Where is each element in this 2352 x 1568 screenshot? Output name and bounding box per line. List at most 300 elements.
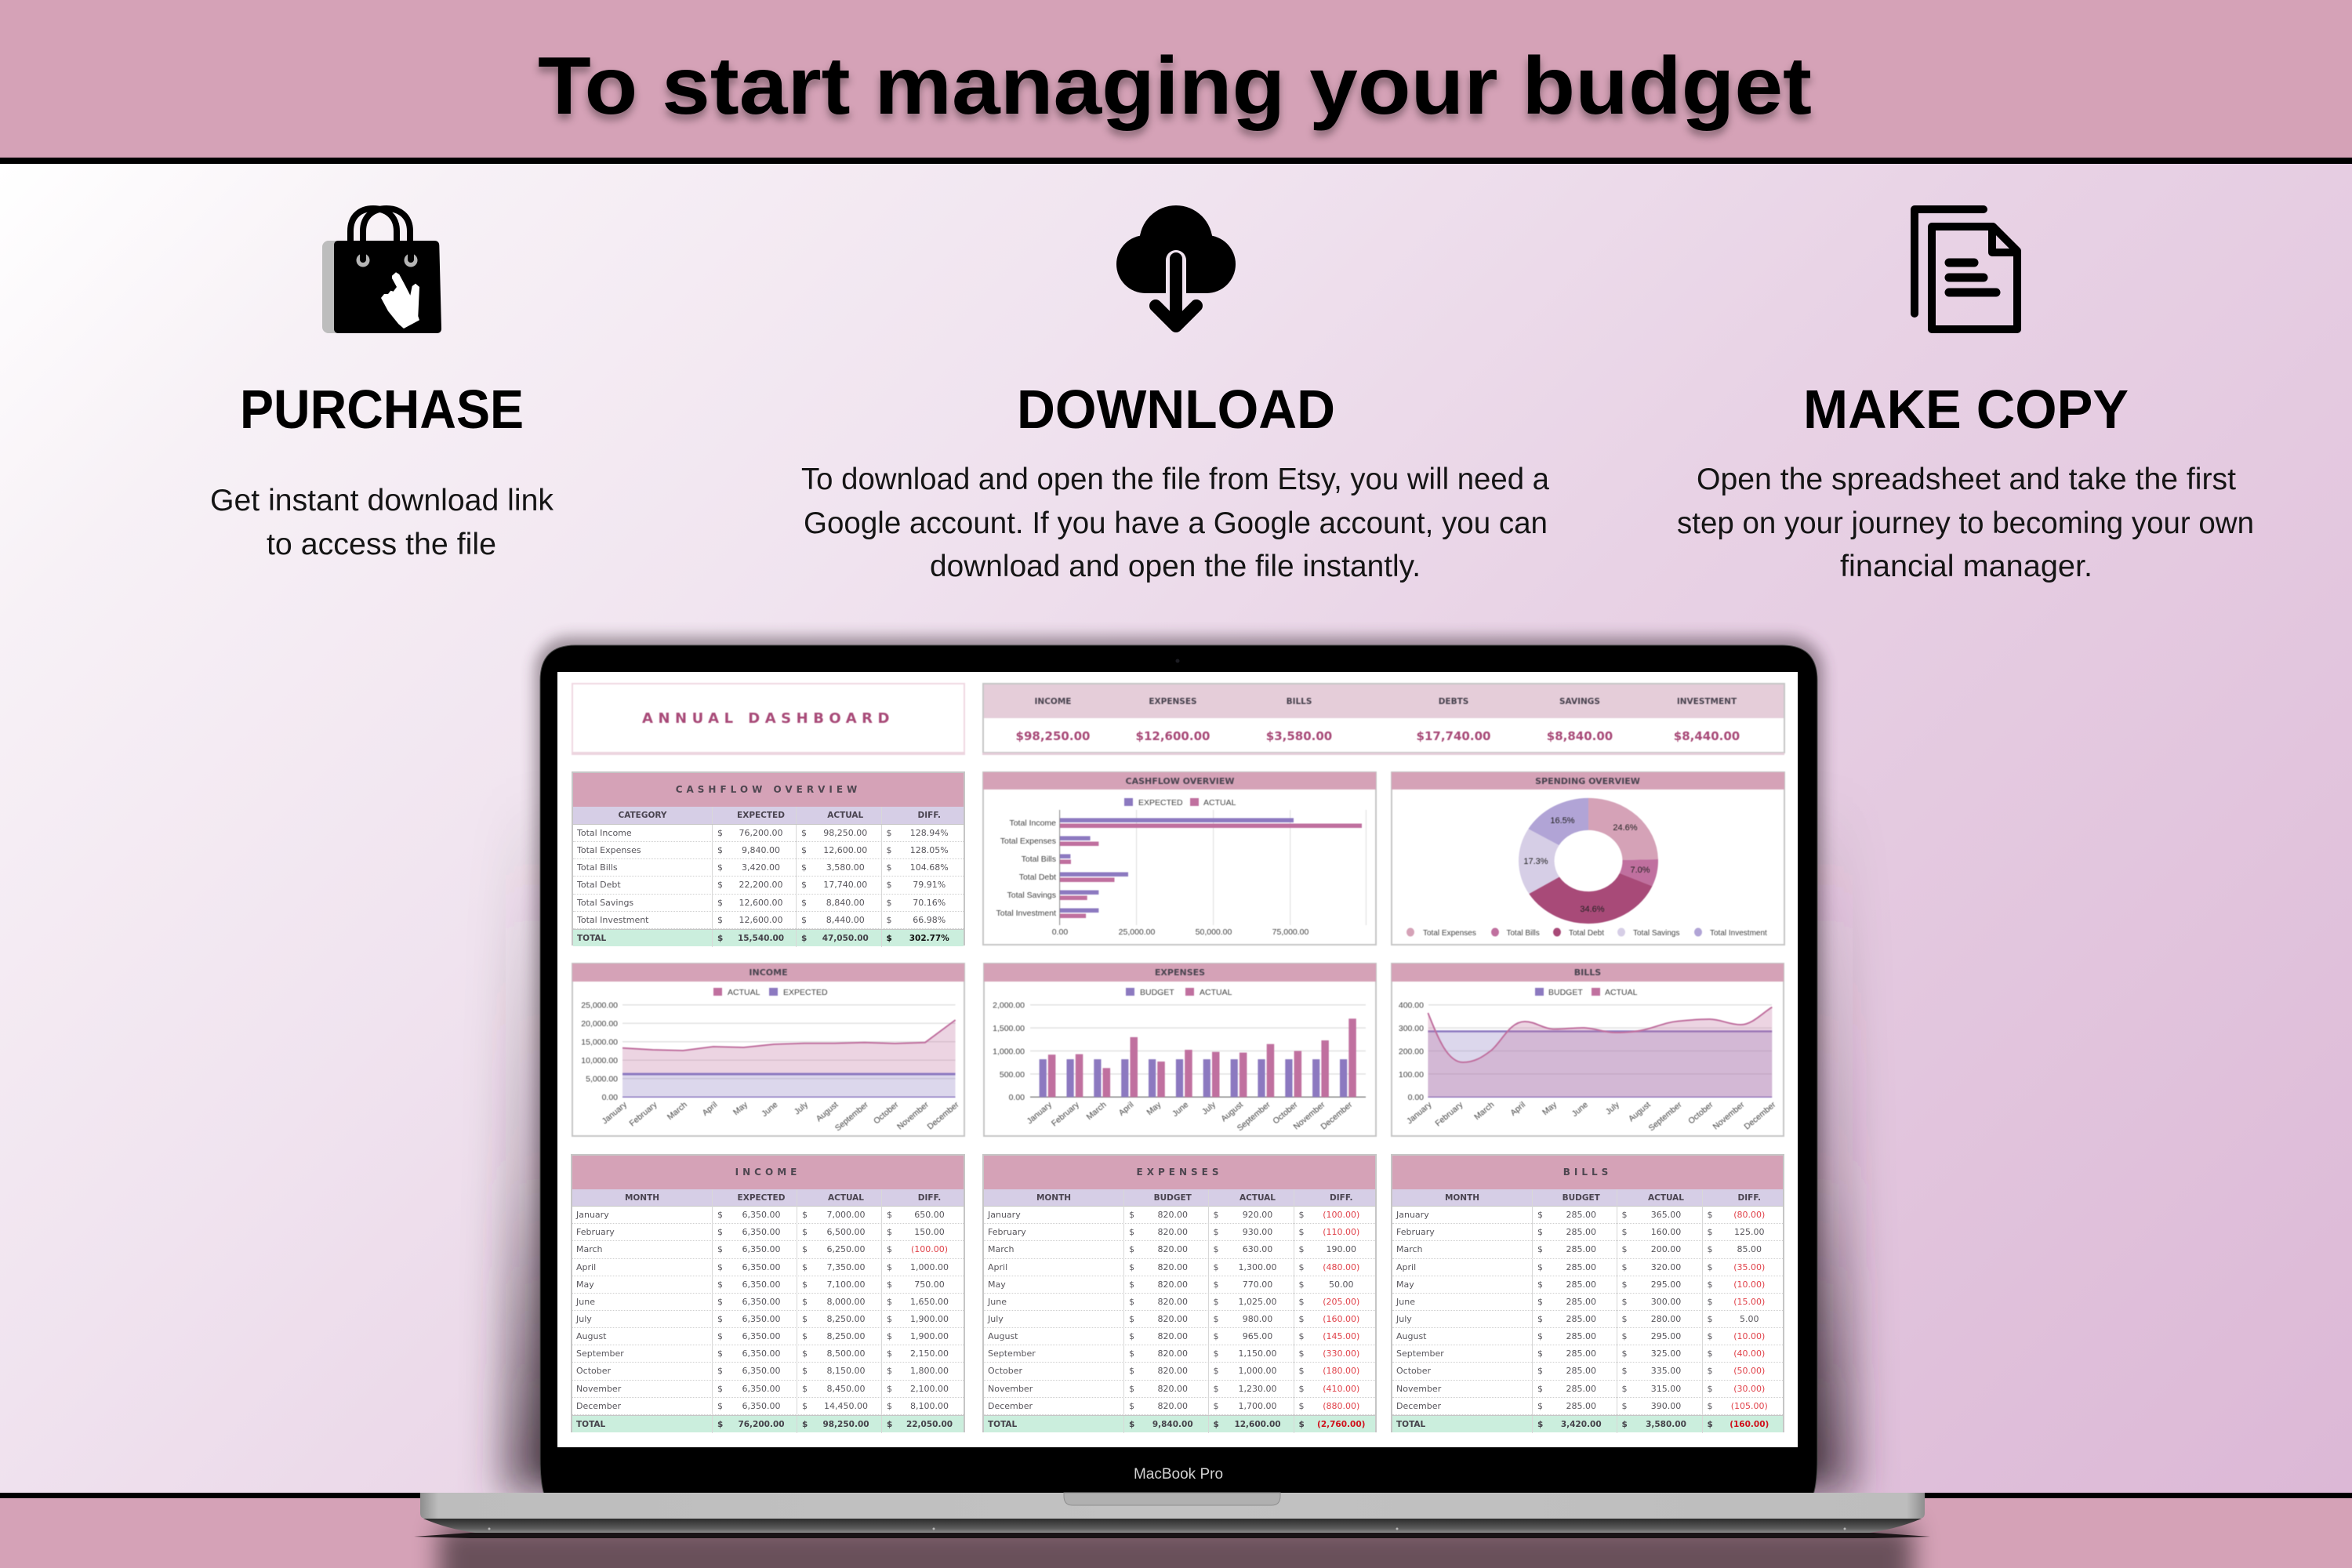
table rows: 125.00 [1734, 1227, 1764, 1237]
month labels: April [701, 1100, 719, 1118]
table rows: $ [1129, 1279, 1134, 1290]
category labels: Total Expenses [1000, 837, 1056, 846]
table rows: $ [1708, 1210, 1712, 1220]
category labels: Total Savings [1007, 891, 1056, 900]
table rows: $ [887, 1384, 892, 1394]
summary values: $8,840.00 [1547, 729, 1613, 743]
table heading: EXPENSES [1137, 1167, 1222, 1178]
month labels: May [1541, 1100, 1559, 1117]
month labels [1405, 1100, 1778, 1133]
table total row: 98,250.00 [822, 1420, 869, 1429]
table rows: 8,840.00 [826, 898, 865, 908]
table rows: 128.05% [910, 845, 949, 855]
legend: BUDGET [1140, 988, 1174, 997]
table rows: 12,600.00 [739, 915, 782, 925]
table rows: $ [1214, 1262, 1218, 1272]
table rows: November [988, 1384, 1033, 1394]
table heading [1392, 1156, 1783, 1189]
table rows [984, 1207, 1375, 1415]
table rows: $ [1537, 1331, 1543, 1341]
table rows: 7,100.00 [826, 1279, 865, 1290]
month labels: April [1117, 1100, 1136, 1118]
table rows: February [1396, 1227, 1435, 1237]
table rows: 285.00 [1566, 1348, 1596, 1359]
table total row: $ [1214, 1420, 1219, 1429]
table rows: $ [802, 1401, 808, 1411]
table rows: $ [887, 1244, 892, 1254]
legend: ACTUAL [1200, 988, 1232, 997]
table rows: 128.94% [910, 828, 949, 838]
table rows: $ [1129, 1227, 1134, 1237]
table rows: 8,150.00 [826, 1366, 865, 1376]
table rows: March [1396, 1244, 1423, 1254]
table rows: $ [1214, 1227, 1218, 1237]
budget bars [1040, 1059, 1347, 1097]
table total row: $ [887, 1420, 892, 1429]
y axis labels: 0.00 [1408, 1093, 1424, 1102]
table rows: 285.00 [1566, 1366, 1596, 1376]
text: download description [801, 463, 1549, 583]
table rows: $ [1214, 1401, 1218, 1411]
donut legend: Total Bills [1507, 929, 1540, 938]
month labels: January [1025, 1100, 1054, 1126]
y axis labels: 1,000.00 [993, 1047, 1025, 1057]
table rows: 820.00 [1157, 1297, 1188, 1307]
table total row [1392, 1415, 1783, 1432]
summary labels: DEBTS [1439, 697, 1468, 706]
table rows: $ [1214, 1331, 1218, 1341]
month labels: December [1319, 1100, 1355, 1131]
expected area and line [622, 1074, 955, 1097]
table rows: 365.00 [1651, 1210, 1681, 1220]
month labels [1025, 1100, 1355, 1133]
table rows: (100.00) [1323, 1210, 1359, 1220]
table rows: 930.00 [1243, 1227, 1272, 1237]
table column headers: DIFF. [1738, 1193, 1761, 1203]
table rows: $ [1298, 1331, 1305, 1341]
icon: cloud download [1116, 205, 1236, 326]
table rows: $ [717, 1331, 723, 1341]
month labels: February [1050, 1100, 1081, 1128]
table rows: $ [717, 1401, 723, 1411]
table total row [573, 929, 964, 946]
table rows: $ [802, 1366, 808, 1376]
table rows: $ [887, 1262, 892, 1272]
month labels: April [1508, 1100, 1527, 1118]
table rows: (15.00) [1733, 1297, 1765, 1307]
category labels: Total Bills [1022, 855, 1056, 864]
table total row: TOTAL [988, 1420, 1017, 1429]
donut chart [1519, 798, 1658, 924]
table total row: $ [1537, 1420, 1543, 1429]
step: make copy [1677, 209, 2254, 583]
table rows: (100.00) [911, 1244, 948, 1254]
table heading: BILLS [1563, 1167, 1612, 1178]
table rows: $ [717, 1262, 723, 1272]
table rows: 820.00 [1157, 1348, 1188, 1359]
table rows: $ [802, 1279, 808, 1290]
table heading [984, 1156, 1375, 1189]
table rows: May [988, 1279, 1006, 1290]
table rows: $ [1537, 1348, 1543, 1359]
table column headers: EXPECTED [738, 1193, 785, 1203]
table rows: (30.00) [1733, 1384, 1765, 1394]
table rows: $ [1298, 1401, 1305, 1411]
table rows: $ [802, 1384, 808, 1394]
table rows: $ [801, 862, 807, 873]
table rows: 285.00 [1566, 1262, 1596, 1272]
donut labels: 24.6% [1613, 823, 1638, 833]
table total row: 9,840.00 [1152, 1420, 1193, 1429]
table rows: 8,450.00 [826, 1384, 865, 1394]
table column headers: MONTH [1445, 1193, 1479, 1203]
table rows: April [576, 1262, 596, 1272]
table rows: 285.00 [1566, 1227, 1596, 1237]
table total row: TOTAL [576, 1420, 605, 1429]
table rows: $ [1298, 1262, 1305, 1272]
table total row: $ [1129, 1420, 1134, 1429]
chart title: INCOME [749, 967, 788, 978]
table rows: September [988, 1348, 1036, 1359]
table rows: 76,200.00 [739, 828, 782, 838]
table rows: $ [1708, 1384, 1712, 1394]
table rows: 79.91% [913, 880, 946, 890]
table rows: $ [801, 915, 807, 925]
table rows: 8,100.00 [910, 1401, 949, 1411]
table rows: 3,580.00 [826, 862, 865, 873]
table column headers: ACTUAL [828, 1193, 864, 1203]
month labels: November [1711, 1100, 1747, 1131]
table column headers: MONTH [625, 1193, 659, 1203]
donut legend: Total Debt [1569, 929, 1604, 938]
table rows: July [576, 1314, 592, 1324]
value axis labels: 50,000.00 [1196, 927, 1232, 937]
donut labels: 34.6% [1580, 905, 1605, 914]
y axis labels: 200.00 [1399, 1047, 1424, 1057]
table rows: 980.00 [1243, 1314, 1272, 1324]
heading: purchase: PURCHASE [240, 379, 524, 440]
table rows: $ [1537, 1210, 1543, 1220]
table rows: September [1396, 1348, 1444, 1359]
table rows: (330.00) [1323, 1348, 1359, 1359]
panel: expenses bar chart [984, 964, 1376, 1136]
table rows: 8,440.00 [826, 915, 865, 925]
table total row: 3,420.00 [1561, 1420, 1602, 1429]
table rows: $ [1298, 1279, 1305, 1290]
y axis labels: 15,000.00 [581, 1038, 618, 1047]
summary labels: INVESTMENT [1677, 697, 1737, 706]
title: To start managing your budget [538, 41, 1812, 132]
panel: bills table [1391, 1154, 1784, 1432]
table total row: TOTAL [577, 934, 606, 943]
table rows: $ [1129, 1210, 1134, 1220]
horizontal bars [1060, 818, 1362, 918]
table total row: (160.00) [1730, 1420, 1769, 1429]
table rows: $ [1214, 1314, 1218, 1324]
table rows: $ [886, 828, 892, 838]
macbook label: MacBook Pro [1134, 1466, 1223, 1483]
table rows: 6,350.00 [742, 1227, 780, 1237]
table rows: 6,350.00 [742, 1331, 780, 1341]
table total row: 47,050.00 [822, 934, 869, 943]
table column headers: MONTH [1036, 1193, 1071, 1203]
category labels: Total Income [1009, 818, 1056, 828]
donut legend: Total Expenses [1423, 929, 1476, 938]
table rows: October [576, 1366, 611, 1376]
month labels: February [1433, 1100, 1465, 1128]
table heading: INCOME [735, 1167, 800, 1178]
table rows: 17,740.00 [823, 880, 867, 890]
table rows: $ [887, 1279, 892, 1290]
table rows: 12,600.00 [739, 898, 782, 908]
table rows: 6,250.00 [826, 1244, 865, 1254]
legend [713, 988, 828, 997]
table rows: 1,025.00 [1239, 1297, 1276, 1307]
legend: ACTUAL [728, 988, 760, 997]
table rows: $ [1537, 1244, 1543, 1254]
table rows: April [1396, 1262, 1416, 1272]
table rows: $ [1621, 1297, 1628, 1307]
table rows: 50.00 [1329, 1279, 1353, 1290]
month labels: January [601, 1100, 629, 1126]
table rows: 650.00 [914, 1210, 945, 1220]
table rows: 390.00 [1651, 1401, 1681, 1411]
table rows: $ [717, 845, 723, 855]
table column headers: BUDGET [1563, 1193, 1600, 1203]
table rows: $ [887, 1348, 892, 1359]
table rows: (480.00) [1323, 1262, 1359, 1272]
text: make copy description [1677, 463, 2254, 583]
text: download description: Google account. If you have a Google account, you can [804, 506, 1548, 540]
table rows: $ [802, 1331, 808, 1341]
table rows: 200.00 [1651, 1244, 1681, 1254]
table rows: 7,350.00 [826, 1262, 865, 1272]
table rows: 8,250.00 [826, 1331, 865, 1341]
hinge notch [1064, 1493, 1280, 1505]
table rows: February [988, 1227, 1026, 1237]
table rows: December [988, 1401, 1033, 1411]
month labels: August [1627, 1100, 1653, 1123]
y axis labels: 1,500.00 [993, 1024, 1025, 1033]
text: make copy description: Open the spreadsheet and take the first [1697, 463, 2236, 496]
panel: cashflow overview chart [983, 772, 1376, 945]
screen [557, 672, 1798, 1447]
table total row: $ [1708, 1420, 1713, 1429]
table rows: $ [1129, 1244, 1134, 1254]
table rows: 325.00 [1651, 1348, 1681, 1359]
table rows: $ [887, 1297, 892, 1307]
table rows: December [1396, 1401, 1441, 1411]
table rows: $ [887, 1401, 892, 1411]
table column headers [984, 1189, 1375, 1207]
y axis labels: 300.00 [1399, 1024, 1424, 1033]
table rows: $ [802, 1314, 808, 1324]
table rows: $ [717, 1384, 723, 1394]
table rows: (180.00) [1323, 1366, 1359, 1376]
table rows: (110.00) [1323, 1227, 1359, 1237]
table rows: 820.00 [1157, 1314, 1188, 1324]
table rows: 2,150.00 [910, 1348, 949, 1359]
table total row: 15,540.00 [738, 934, 784, 943]
table rows: 315.00 [1651, 1384, 1681, 1394]
table rows: 280.00 [1651, 1314, 1681, 1324]
table rows: 1,900.00 [910, 1314, 949, 1324]
table rows: 1,300.00 [1239, 1262, 1276, 1272]
value axis labels: 25,000.00 [1119, 927, 1156, 937]
heading: download: DOWNLOAD [1017, 379, 1335, 440]
table rows: $ [1537, 1262, 1543, 1272]
table rows: 285.00 [1566, 1384, 1596, 1394]
table rows [573, 825, 964, 929]
table rows: $ [1214, 1210, 1218, 1220]
table rows: 335.00 [1651, 1366, 1681, 1376]
donut labels: 16.5% [1550, 816, 1575, 826]
table rows: November [1396, 1384, 1441, 1394]
table rows: 6,350.00 [742, 1348, 780, 1359]
y axis labels: 500.00 [1000, 1070, 1025, 1080]
summary values: $98,250.00 [1016, 729, 1090, 743]
table column headers: DIFF. [918, 1193, 941, 1203]
base feet [488, 1527, 1846, 1530]
table rows: (145.00) [1323, 1331, 1359, 1341]
table rows: $ [717, 1366, 723, 1376]
table rows: Total Expenses [577, 845, 641, 855]
panel: expenses table [982, 1154, 1377, 1432]
summary values [1016, 729, 1740, 743]
table rows: $ [1298, 1384, 1305, 1394]
table rows: $ [802, 1227, 808, 1237]
month labels: August [815, 1100, 840, 1123]
table rows: $ [1537, 1384, 1543, 1394]
table rows: 3,420.00 [742, 862, 780, 873]
y axis labels: 2,000.00 [993, 1000, 1025, 1010]
table rows: 190.00 [1327, 1244, 1356, 1254]
table total row: 3,580.00 [1646, 1420, 1686, 1429]
table rows: 820.00 [1157, 1244, 1188, 1254]
summary labels: SAVINGS [1559, 697, 1600, 706]
step: purchase [210, 209, 554, 561]
table rows: 1,000.00 [1239, 1366, 1276, 1376]
table rows: 750.00 [914, 1279, 945, 1290]
text: purchase description: to access the file [267, 528, 496, 561]
table rows: 1,230.00 [1239, 1384, 1276, 1394]
table rows: March [988, 1244, 1014, 1254]
month labels [601, 1100, 961, 1133]
table rows: $ [1129, 1384, 1134, 1394]
base shadow on bottom band [439, 1525, 1913, 1568]
summary labels [1035, 697, 1737, 706]
legend: BUDGET [1548, 988, 1583, 997]
table column headers: DIFF. [1330, 1193, 1352, 1203]
month labels: May [1145, 1100, 1163, 1117]
laptop base [420, 1493, 1925, 1519]
month labels: November [895, 1100, 931, 1131]
icon: shopping bag with pointer hand [322, 209, 441, 333]
table rows: 6,350.00 [742, 1366, 780, 1376]
table rows: (50.00) [1733, 1366, 1765, 1376]
month labels: June [1171, 1100, 1190, 1119]
table rows: $ [1298, 1348, 1305, 1359]
table rows: $ [1621, 1210, 1628, 1220]
month labels: June [760, 1100, 780, 1119]
table rows: $ [717, 1297, 723, 1307]
actual bars [1048, 1018, 1356, 1097]
table rows: $ [1621, 1384, 1628, 1394]
table total row: 76,200.00 [738, 1420, 785, 1429]
month labels: December [926, 1100, 961, 1131]
table rows: (35.00) [1733, 1262, 1765, 1272]
table rows [572, 1207, 964, 1415]
table rows: Total Bills [577, 862, 618, 873]
table rows: $ [717, 828, 723, 838]
table rows: $ [802, 1297, 808, 1307]
summary labels: EXPENSES [1149, 697, 1197, 706]
table rows: $ [801, 828, 807, 838]
table heading [572, 1156, 964, 1189]
table rows: $ [1537, 1279, 1543, 1290]
month labels: October [872, 1100, 901, 1126]
panel: summary totals [982, 684, 1784, 755]
table rows: 2,100.00 [910, 1384, 949, 1394]
table rows: $ [1214, 1348, 1218, 1359]
camera dot [1176, 659, 1179, 663]
donut legend [1406, 928, 1767, 938]
y axis labels: 100.00 [1399, 1070, 1424, 1080]
y axis labels: 20,000.00 [581, 1019, 618, 1029]
table rows: 66.98% [913, 915, 946, 925]
table rows [1392, 1207, 1783, 1415]
table rows: 820.00 [1157, 1279, 1188, 1290]
laptop shadow [506, 637, 1853, 1494]
table rows: $ [887, 1227, 892, 1237]
table rows: $ [802, 1210, 808, 1220]
value axis labels: 0.00 [1052, 927, 1068, 937]
table rows: 820.00 [1157, 1366, 1188, 1376]
table rows: 630.00 [1243, 1244, 1272, 1254]
table rows: $ [1214, 1244, 1218, 1254]
month labels: July [1604, 1100, 1621, 1116]
table rows: $ [717, 862, 723, 873]
month labels: March [666, 1100, 689, 1122]
legend [1535, 988, 1638, 997]
table rows: 6,350.00 [742, 1279, 780, 1290]
table rows: $ [1129, 1401, 1134, 1411]
table total row [984, 1415, 1375, 1432]
table rows: $ [1298, 1314, 1305, 1324]
table rows: $ [1537, 1227, 1543, 1237]
table rows: 285.00 [1566, 1331, 1596, 1341]
text: purchase description: Get instant download link [210, 484, 554, 517]
table rows: $ [1621, 1331, 1628, 1341]
table rows: $ [1129, 1262, 1134, 1272]
text: download description: To download and open the file from Etsy, you will need a [801, 463, 1549, 496]
table heading: CASHFLOW OVERVIEW [676, 784, 861, 795]
bottom black rule [0, 1493, 2352, 1498]
table rows: 770.00 [1243, 1279, 1272, 1290]
table rows: $ [1708, 1366, 1712, 1376]
table rows: 820.00 [1157, 1401, 1188, 1411]
chart title: SPENDING OVERVIEW [1535, 776, 1640, 786]
y axis labels: 0.00 [602, 1093, 618, 1102]
table rows: (880.00) [1323, 1401, 1359, 1411]
y axis labels [1399, 1000, 1424, 1102]
table rows: $ [1708, 1227, 1712, 1237]
table rows: 6,350.00 [742, 1262, 780, 1272]
table rows: Total Investment [577, 915, 649, 925]
table rows: (10.00) [1733, 1279, 1765, 1290]
table total row: $ [802, 1420, 808, 1429]
table rows: $ [886, 898, 892, 908]
